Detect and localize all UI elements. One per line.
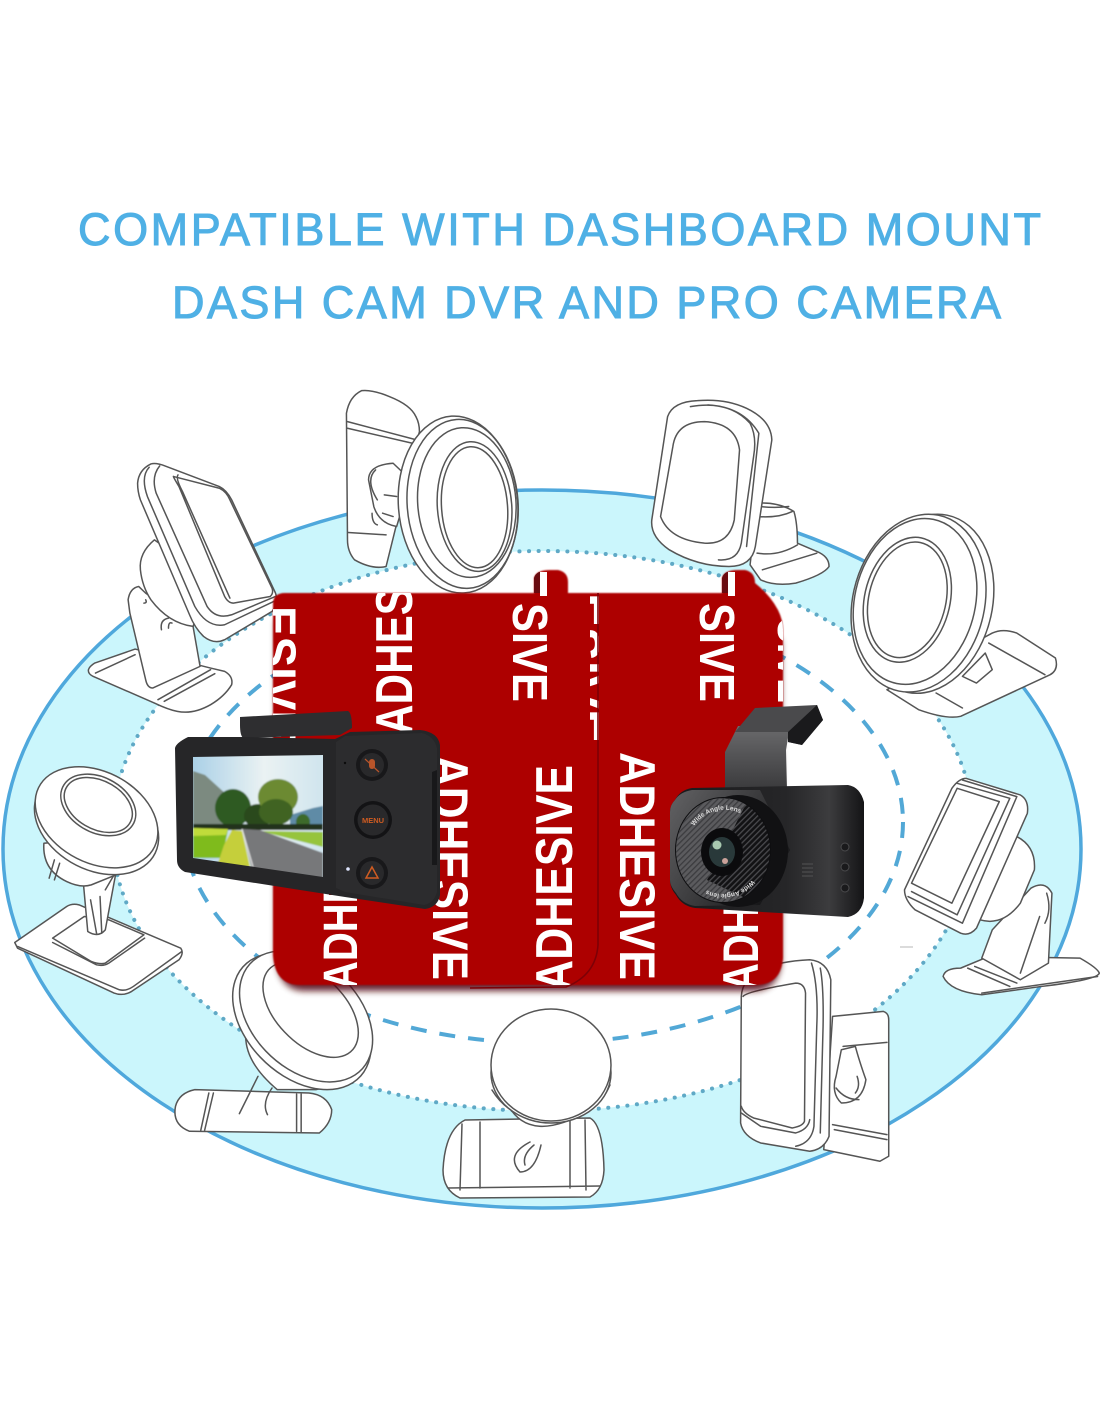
lens barrel [688,795,788,907]
adhesive pads [250,570,823,992]
mount: pill base round mount bottom left [175,926,399,1133]
mic button [356,749,388,781]
screen landscape [190,752,325,882]
mount: tablet mount right [905,778,1099,995]
clip mount block [240,711,352,738]
adhesive lettering [250,572,823,992]
lens glass [701,828,743,876]
hazard button [356,857,388,889]
mount: tablet mount top left [88,464,277,712]
bracket arm [725,726,790,790]
right dash cam, lens view [670,705,864,917]
front plate [670,790,790,906]
adhesive lettering: ESIVE [554,593,610,743]
diagram background: concentric ellipses [3,490,1081,1208]
mount: square base mount left [14,746,182,994]
adhesive lettering: ESIVE [250,606,306,741]
lens label text: Wide Angle Lens [690,805,741,826]
camera body [175,730,440,909]
adhesive lettering: ADHESIVE [526,765,584,992]
side buttons [841,843,849,851]
adhesive lettering: ADHESIVE [609,752,665,980]
title: DASH CAM DVR AND PRO CAMERA [172,277,1001,328]
left dash cam, rear screen view: MENU [362,816,384,825]
side button strip [432,770,437,865]
menu button [354,801,392,839]
adhesive lettering: ADHESIVE [422,755,478,980]
adhesive lettering: ADHES [713,852,769,992]
camera body [670,785,864,917]
mount: rounded rectangle mount top right [652,400,829,584]
adhesive lettering: SIVE [767,618,823,703]
adhesive lettering: SIVE [502,603,556,702]
small grey mark [900,946,913,948]
red pad shape [273,570,783,985]
mount: round magnetic mount top [346,390,524,597]
mount: rectangular mount bottom right [741,960,889,1161]
adhesive lettering: ADHES [366,587,424,735]
speaker grille [802,864,813,876]
indicator lights [346,867,350,871]
seam between pads [470,593,598,988]
mount: round magnetic mount right [834,502,1056,717]
pad shadow [276,620,781,991]
title [78,204,1041,328]
right dash cam, lens view: Wide Angle lens [706,880,756,899]
adhesive lettering: ADHES [315,850,368,990]
adhesive lettering: SIVE [689,603,743,702]
left dash cam, rear screen view [175,711,440,909]
carbon lens bezel [675,797,771,903]
title: COMPATIBLE WITH DASHBOARD MOUNT [78,204,1041,255]
mount: round mount bottom centre [443,1009,611,1198]
